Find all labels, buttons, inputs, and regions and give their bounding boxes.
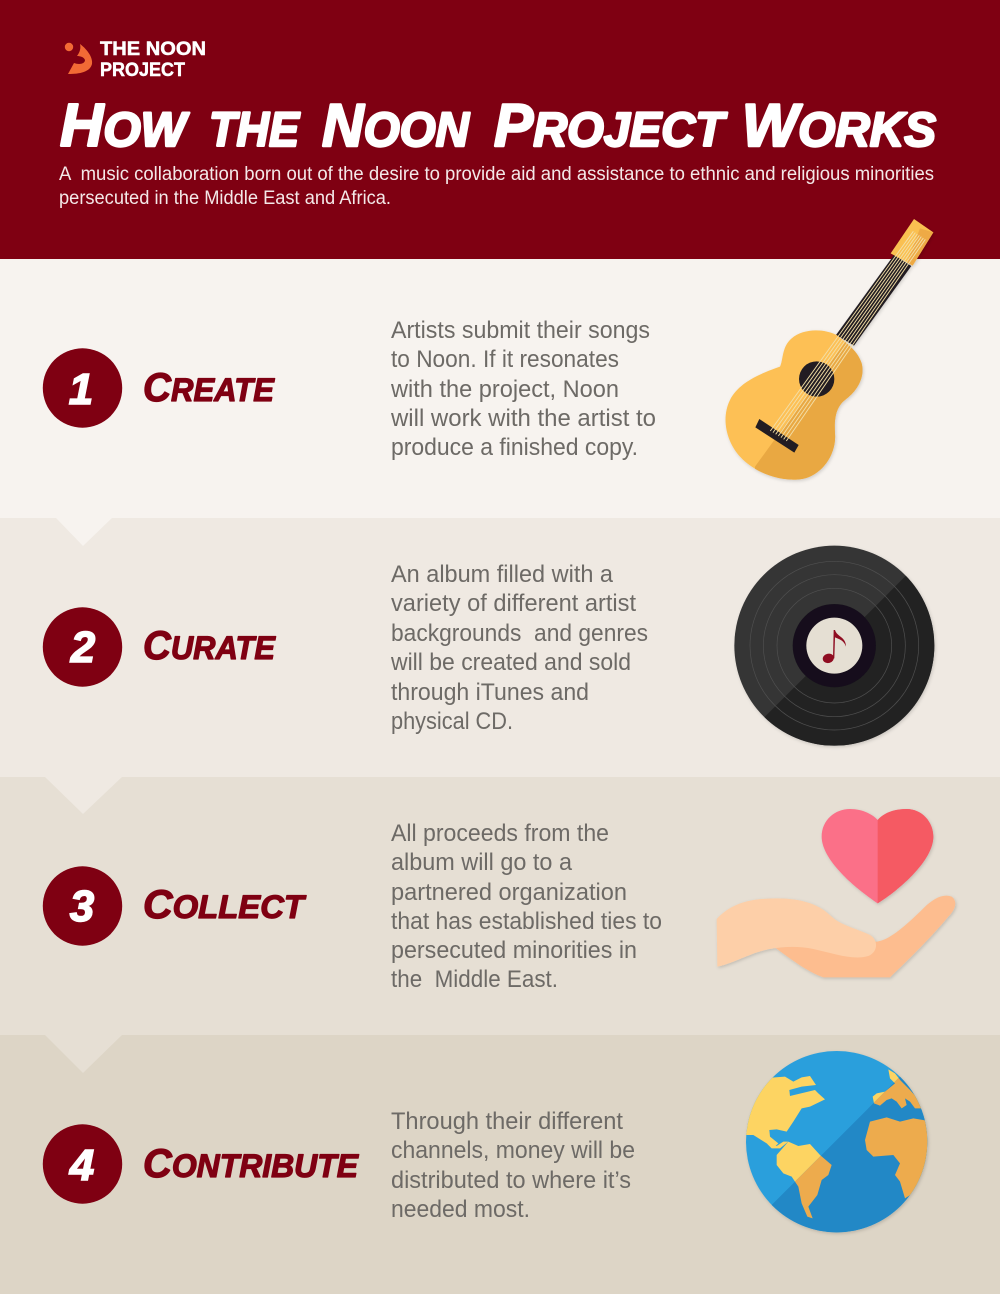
badge: number 2: 2 xyxy=(70,623,96,672)
icon: guitar xyxy=(726,219,933,480)
heading: contribute: CONTRIBUTE xyxy=(143,1142,360,1186)
text: contribute description: channels, money will be xyxy=(391,1137,635,1164)
text: curate description xyxy=(390,561,648,735)
pointer: step 2 to 3 xyxy=(45,777,122,814)
text: curate description: physical CD. xyxy=(391,708,513,735)
panel: step 1 create xyxy=(0,259,1000,518)
text: collect description: album will go to a xyxy=(391,849,573,876)
badge: number 3 xyxy=(43,866,122,946)
text: collect description: that has established ties to xyxy=(391,908,662,935)
text: collect description: the Middle East. xyxy=(391,966,558,993)
text: collect description xyxy=(391,820,662,993)
text: create description xyxy=(390,317,656,461)
title: PROJECT xyxy=(494,92,728,159)
text: collect description: persecuted minorities in xyxy=(391,937,637,964)
badge: number 4: 4 xyxy=(69,1141,94,1190)
badge: number 1: 1 xyxy=(69,365,93,414)
title: THE xyxy=(209,104,301,157)
header panel xyxy=(0,0,1000,259)
title: HOW xyxy=(60,92,190,159)
text: create description: Artists submit their songs xyxy=(391,317,650,344)
logo: The Noon Project: THE NOON xyxy=(100,39,206,60)
text: curate description: An album filled with a xyxy=(391,561,614,588)
text: create description: with the project, Noon xyxy=(390,376,619,403)
subtitle: persecuted in the Middle East and Africa. xyxy=(59,188,391,209)
text: collect description: All proceeds from the xyxy=(391,820,609,847)
badge: number 1 xyxy=(43,348,122,428)
text: collect description: partnered organization xyxy=(391,879,627,906)
icon: heart and hand xyxy=(717,809,955,977)
text: create description: will work with the artist to xyxy=(390,405,656,432)
text: curate description: variety of different artist xyxy=(391,590,636,617)
heading: create: CREATE xyxy=(143,366,276,410)
text: curate description: will be created and sold xyxy=(390,649,631,676)
panel: step 4 contribute xyxy=(0,1035,1000,1294)
badge: number 4 xyxy=(43,1124,122,1204)
logo: The Noon Project: PROJECT xyxy=(100,60,185,81)
title: WORKS xyxy=(742,92,936,159)
panel: step 3 collect xyxy=(0,777,1000,1035)
subtitle: A music collaboration born out of the desire to provide aid and assistance to ethnic and religious minorities xyxy=(59,164,934,185)
icon: globe xyxy=(743,1051,933,1232)
logo: The Noon Project xyxy=(65,39,206,81)
title xyxy=(60,92,936,159)
text: curate description: through iTunes and xyxy=(391,679,589,706)
text: contribute description: distributed to where it’s xyxy=(391,1167,631,1194)
pointer: step 1 to 2 xyxy=(56,518,112,546)
badge: number 3: 3 xyxy=(70,882,94,931)
text: contribute description: Through their different xyxy=(391,1108,623,1135)
title: NOON xyxy=(322,92,470,159)
text: create description: produce a finished copy. xyxy=(391,434,638,461)
text: contribute description: needed most. xyxy=(391,1196,530,1223)
subtitle xyxy=(59,164,934,209)
pointer: step 3 to 4 xyxy=(45,1035,122,1073)
icon: vinyl record xyxy=(734,546,934,746)
badge: number 2 xyxy=(43,607,122,687)
text: create description: to Noon. If it resonates xyxy=(391,346,619,373)
text: curate description: backgrounds and genres xyxy=(391,620,648,647)
panel: step 2 curate xyxy=(0,518,1000,777)
heading: curate: CURATE xyxy=(143,624,277,668)
text: contribute description xyxy=(391,1108,635,1223)
heading: collect: COLLECT xyxy=(143,883,307,927)
